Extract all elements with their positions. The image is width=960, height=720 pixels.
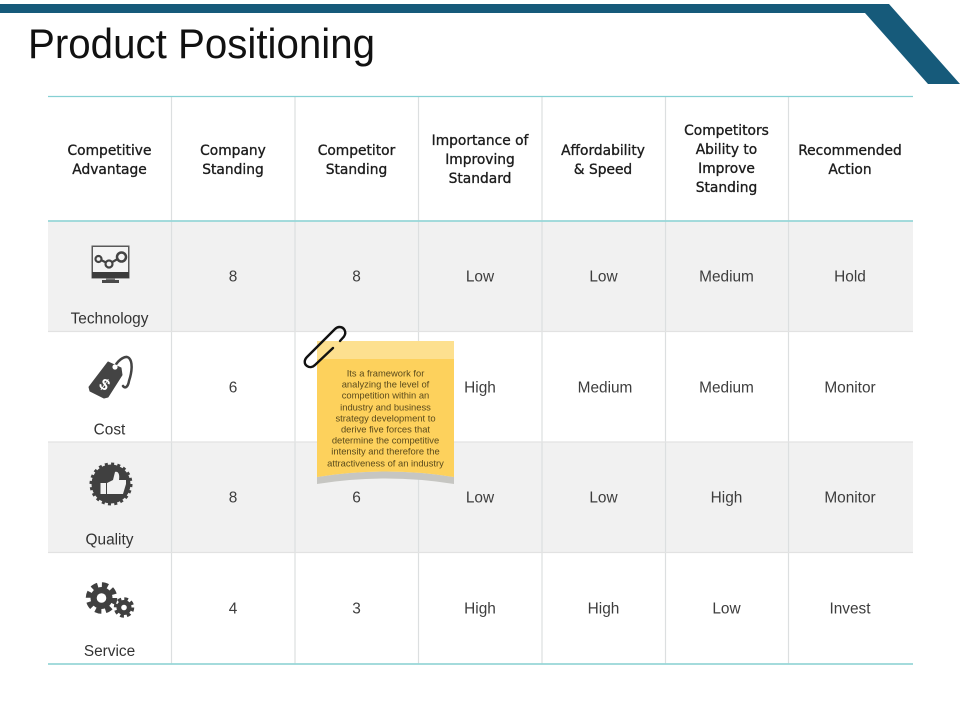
note text <box>327 368 444 468</box>
table header row: Ability to <box>696 142 757 158</box>
note text: strategy development to <box>335 412 436 424</box>
table header row: Competitor <box>318 143 396 159</box>
table header row: Standing <box>202 162 264 178</box>
row: quality: 8 <box>229 490 237 506</box>
table header row: Company <box>200 143 266 159</box>
row: service <box>84 585 871 660</box>
note text: derive five forces that <box>341 424 430 434</box>
row: service: Low <box>712 600 742 618</box>
row: technology: 8 <box>352 268 361 286</box>
table header row: Recommended <box>798 143 902 159</box>
label: quality: Quality <box>86 532 134 548</box>
row: quality <box>86 464 876 548</box>
note text: competition within an <box>342 390 429 400</box>
icon: price tag: $ <box>96 376 113 395</box>
row: service: 3 <box>352 600 361 618</box>
icon: thumbs up badge <box>91 464 131 504</box>
row: service: 4 <box>229 600 238 618</box>
row: service: High <box>464 600 496 618</box>
header banner <box>0 4 960 84</box>
table header row: Standard <box>449 171 511 187</box>
table header row: Action <box>828 162 872 178</box>
row: cost: Monitor <box>824 380 876 396</box>
row: service: Invest <box>829 600 871 618</box>
row: technology: Hold <box>834 268 866 286</box>
table header row: Competitive <box>68 143 151 159</box>
row: quality: Monitor <box>824 490 876 506</box>
table header row: Affordability <box>561 143 645 159</box>
row: cost: Medium <box>699 380 754 396</box>
note text: industry and business <box>340 402 431 412</box>
row: quality: High <box>711 490 742 506</box>
icon: monitor with chart <box>92 246 130 283</box>
note text: determine the competitive <box>332 434 439 446</box>
row: quality: Low <box>589 490 619 506</box>
row: cost: Medium <box>578 380 632 396</box>
row: technology: Low <box>589 268 619 286</box>
note text: analyzing the level of <box>342 378 430 390</box>
table header row: Improving <box>445 152 515 168</box>
title: Product Positioning <box>28 20 375 67</box>
note text: Its a framework for <box>347 368 424 378</box>
table header row <box>68 123 902 196</box>
table header row: & Speed <box>574 162 632 178</box>
label: cost: Cost <box>94 422 126 438</box>
table header row: Advantage <box>72 162 147 178</box>
table header row: Competitors <box>684 123 769 139</box>
label: service: Service <box>84 643 135 660</box>
row: technology <box>71 246 866 328</box>
row: cost: High <box>464 380 496 396</box>
label: technology: Technology <box>71 310 149 328</box>
table header row: Standing <box>326 162 387 178</box>
table header row: Improve <box>698 161 755 177</box>
row: technology: 8 <box>229 268 237 286</box>
table header row: Importance of <box>432 133 530 149</box>
row: technology: Low <box>466 268 495 286</box>
row: quality: 6 <box>352 490 361 506</box>
row: technology: Medium <box>699 268 754 286</box>
icon: gears <box>88 585 132 616</box>
row: cost: 6 <box>229 380 237 396</box>
note text: attractiveness of an industry <box>327 458 444 468</box>
sticky note callout <box>305 327 454 484</box>
note text: intensity and therefore the <box>331 446 440 456</box>
table header row: Standing <box>696 180 757 196</box>
row: cost <box>89 357 876 438</box>
table <box>48 96 913 664</box>
row: service: High <box>588 600 619 618</box>
row: quality: Low <box>466 490 495 506</box>
icon: paper clip <box>305 327 345 367</box>
icon: price tag <box>89 357 132 398</box>
